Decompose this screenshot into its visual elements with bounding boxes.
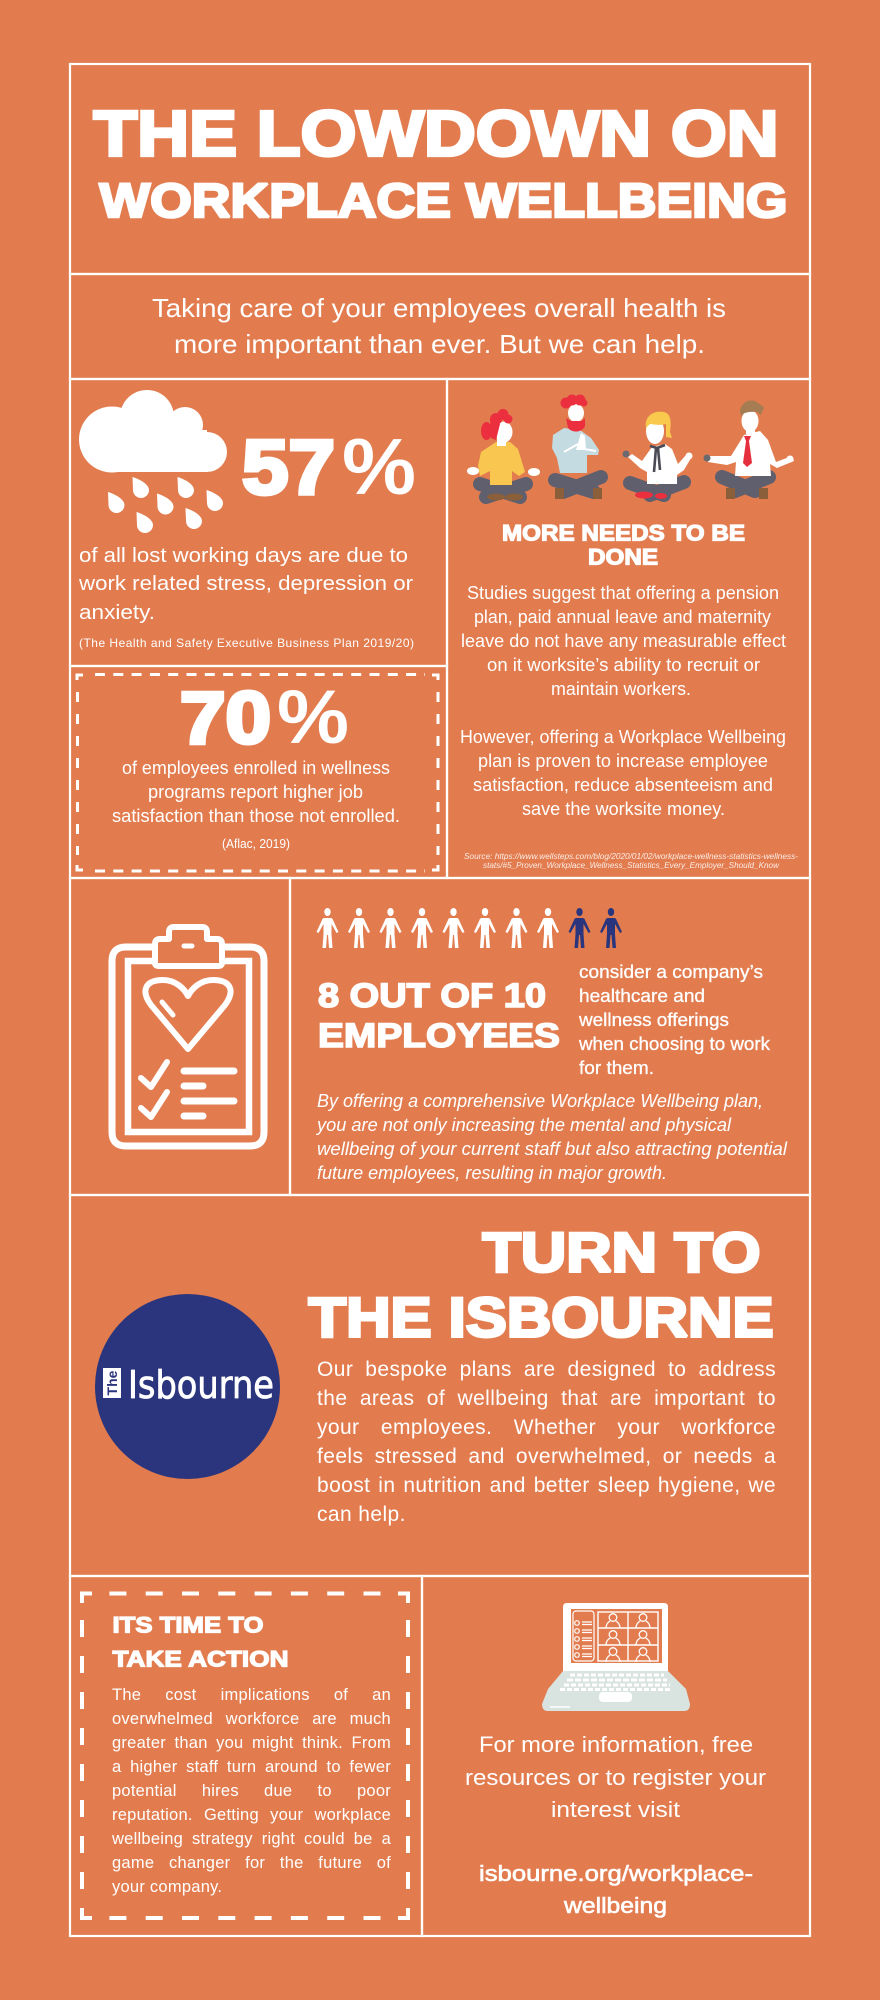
body text: however: However, offering a Workplace Wellbeing — [460, 727, 786, 747]
body text: cost implications: a higher staff turn around to fewer — [112, 1758, 391, 1776]
body text: studies suggest: leave do not have any measurable effect — [461, 631, 786, 651]
panel: 8 out of 10 employees — [290, 878, 810, 1195]
heading: The Lowdown On: THE LOWDOWN ON — [94, 98, 778, 170]
stat: 70%: 70 — [180, 678, 271, 759]
link: isbourne.org/workplace-wellbeing — [479, 1861, 753, 1918]
body text: studies suggest: plan, paid annual leave and maternity — [474, 607, 771, 627]
text: enrolled employees: programs report higher job — [148, 782, 363, 802]
text: lost working days: anxiety. — [79, 601, 155, 624]
stat: 70%: % — [277, 675, 349, 760]
figure: bearded man in blue — [552, 394, 602, 499]
italic text: by offering: future employees, resulting in major growth. — [317, 1163, 667, 1183]
body text: cost implications: game changer for the future of — [112, 1854, 391, 1872]
text: lost working days: work related stress, depression or — [78, 572, 413, 595]
panel: subtitle — [70, 274, 810, 379]
body text: however: satisfaction, reduce absenteeism and — [473, 775, 773, 795]
body text: studies suggest: maintain workers. — [551, 679, 691, 699]
link: isbourne.org/workplace-wellbeing: isbourne.org/workplace- — [479, 1861, 753, 1886]
italic text: by offering: you are not only increasing the mental and physical — [315, 1115, 732, 1135]
text: lost working days — [78, 544, 413, 624]
pictogram: 8 of 10 people — [316, 908, 622, 948]
body text: studies suggest: Studies suggest that offering a pension — [467, 583, 779, 603]
italic text: by offering — [315, 1091, 788, 1183]
heading: more needs to be done — [502, 520, 745, 570]
body text: cost implications: greater than you might think. From — [112, 1734, 391, 1752]
panel: time to take action — [70, 1576, 422, 1936]
source: wellsteps: Source: https://www.wellsteps.com/blog/2020/01/02/workplace-wellness-statistics-wellness- — [464, 851, 798, 861]
panel: more information — [422, 1576, 810, 1936]
stat: 70% — [180, 675, 349, 760]
icon: clipboard with heart — [112, 927, 264, 1146]
text: consider: wellness offerings — [578, 1010, 729, 1030]
heading: more needs to be done: DONE — [588, 544, 658, 570]
source: Aflac: (Aflac, 2019) — [222, 837, 290, 851]
panel: more needs to be done — [447, 379, 810, 878]
body text: bespoke plans: boost in nutrition and better sleep hygiene, we — [317, 1474, 776, 1497]
body text: cost implications: overwhelmed workforce are much — [112, 1710, 391, 1728]
subtitle text: Taking care of your employees overall health is — [152, 293, 726, 323]
body text: bespoke plans: can help. — [317, 1503, 406, 1526]
subtitle text: more important than ever. But we can help. — [174, 329, 705, 359]
body text: cost implications: reputation. Getting your workplace — [112, 1806, 391, 1824]
body text: however: save the worksite money. — [522, 799, 725, 819]
body text: however: plan is proven to increase employee — [478, 751, 768, 771]
dashed frame — [82, 1594, 408, 1918]
source: HSE: (The Health and Safety Executive Business Plan 2019/20) — [79, 636, 414, 650]
source: wellsteps — [464, 851, 798, 870]
body text: bespoke plans: the areas of wellbeing that are important to — [317, 1387, 776, 1410]
figure: woman in white — [622, 412, 692, 499]
stat: 57%: % — [342, 422, 416, 511]
italic text: by offering: By offering a comprehensive Workplace Wellbeing plan, — [317, 1091, 763, 1111]
heading: 8 out of 10 employees: 8 OUT OF 10 — [318, 977, 546, 1015]
body text: cost implications: The cost implications of an — [112, 1686, 391, 1704]
panel: title — [70, 64, 810, 274]
icon: rain cloud — [79, 390, 227, 533]
subtitle text — [152, 293, 726, 359]
panel: 70 percent stat — [70, 666, 447, 878]
text: for more information: For more information, free — [479, 1732, 753, 1757]
logo: the isbourne: Isbourne — [128, 1363, 274, 1407]
body text: cost implications: wellbeing strategy right could be a — [112, 1830, 391, 1848]
text: for more information — [465, 1732, 766, 1822]
heading: 8 out of 10 employees: EMPLOYEES — [318, 1017, 560, 1055]
stat: 57% — [242, 422, 416, 511]
body text: cost implications — [112, 1683, 397, 1903]
icon: laptop with video call — [542, 1603, 690, 1711]
figure: man with red tie — [704, 400, 794, 499]
logo: the isbourne — [95, 1294, 280, 1479]
text: consider: healthcare and — [579, 986, 705, 1006]
heading: its time to take action — [112, 1612, 288, 1672]
logo: the isbourne: The — [104, 1370, 120, 1395]
text: consider: for them. — [579, 1058, 654, 1078]
text: for more information: interest visit — [551, 1797, 680, 1822]
heading: turn to the isbourne — [308, 1220, 774, 1348]
text: enrolled employees — [112, 758, 400, 826]
dashed frame — [77, 674, 438, 871]
body text: bespoke plans: Our bespoke plans are designed to address — [317, 1358, 776, 1381]
text: for more information: resources or to register your — [465, 1765, 766, 1790]
body text: bespoke plans: feels stressed and overwhelmed, or needs a — [317, 1445, 776, 1468]
panel: clipboard icon — [70, 878, 290, 1195]
text: consider: consider a company’s — [579, 962, 763, 982]
heading: its time to take action: ITS TIME TO — [112, 1612, 264, 1638]
heading: Workplace Wellbeing: WORKPLACE WELLBEING — [100, 175, 788, 228]
figure: woman in yellow — [467, 409, 540, 500]
panel: turn to the isbourne — [70, 1195, 810, 1576]
body text: bespoke plans — [317, 1355, 777, 1531]
text: enrolled employees: of employees enrolled in wellness — [122, 758, 390, 778]
body text: bespoke plans: your employees. Whether your workforce — [317, 1416, 776, 1439]
italic text: by offering: wellbeing of your current staff but also attracting potential — [317, 1139, 788, 1159]
text: enrolled employees: satisfaction than those not enrolled. — [112, 806, 400, 826]
body text: studies suggest: on it worksite’s ability to recruit or — [487, 655, 760, 675]
panel: 57 percent stat — [70, 379, 447, 666]
stat: 57%: 57 — [242, 425, 335, 511]
body text: cost implications: your company. — [112, 1878, 222, 1896]
heading: 8 out of 10 employees — [318, 977, 560, 1055]
heading: its time to take action: TAKE ACTION — [112, 1646, 288, 1672]
link: isbourne.org/workplace-wellbeing: wellbeing — [563, 1893, 667, 1918]
heading: turn to the isbourne: THE ISBOURNE — [308, 1286, 774, 1348]
heading: more needs to be done: MORE NEEDS TO BE — [502, 520, 745, 546]
source: wellsteps: stats/#5_Proven_Workplace_Wellness_Statistics_Every_Employer_Should_Know — [483, 860, 780, 870]
text: consider: when choosing to work — [578, 1034, 771, 1054]
illustration: four meditating people — [467, 394, 794, 500]
text: consider — [578, 962, 771, 1078]
body text: cost implications: potential hires due to poor — [112, 1782, 391, 1800]
body text: however — [460, 727, 786, 819]
text: lost working days: of all lost working days are due to — [79, 544, 408, 567]
body text: studies suggest — [461, 583, 786, 699]
heading: turn to the isbourne: TURN TO — [482, 1220, 760, 1284]
